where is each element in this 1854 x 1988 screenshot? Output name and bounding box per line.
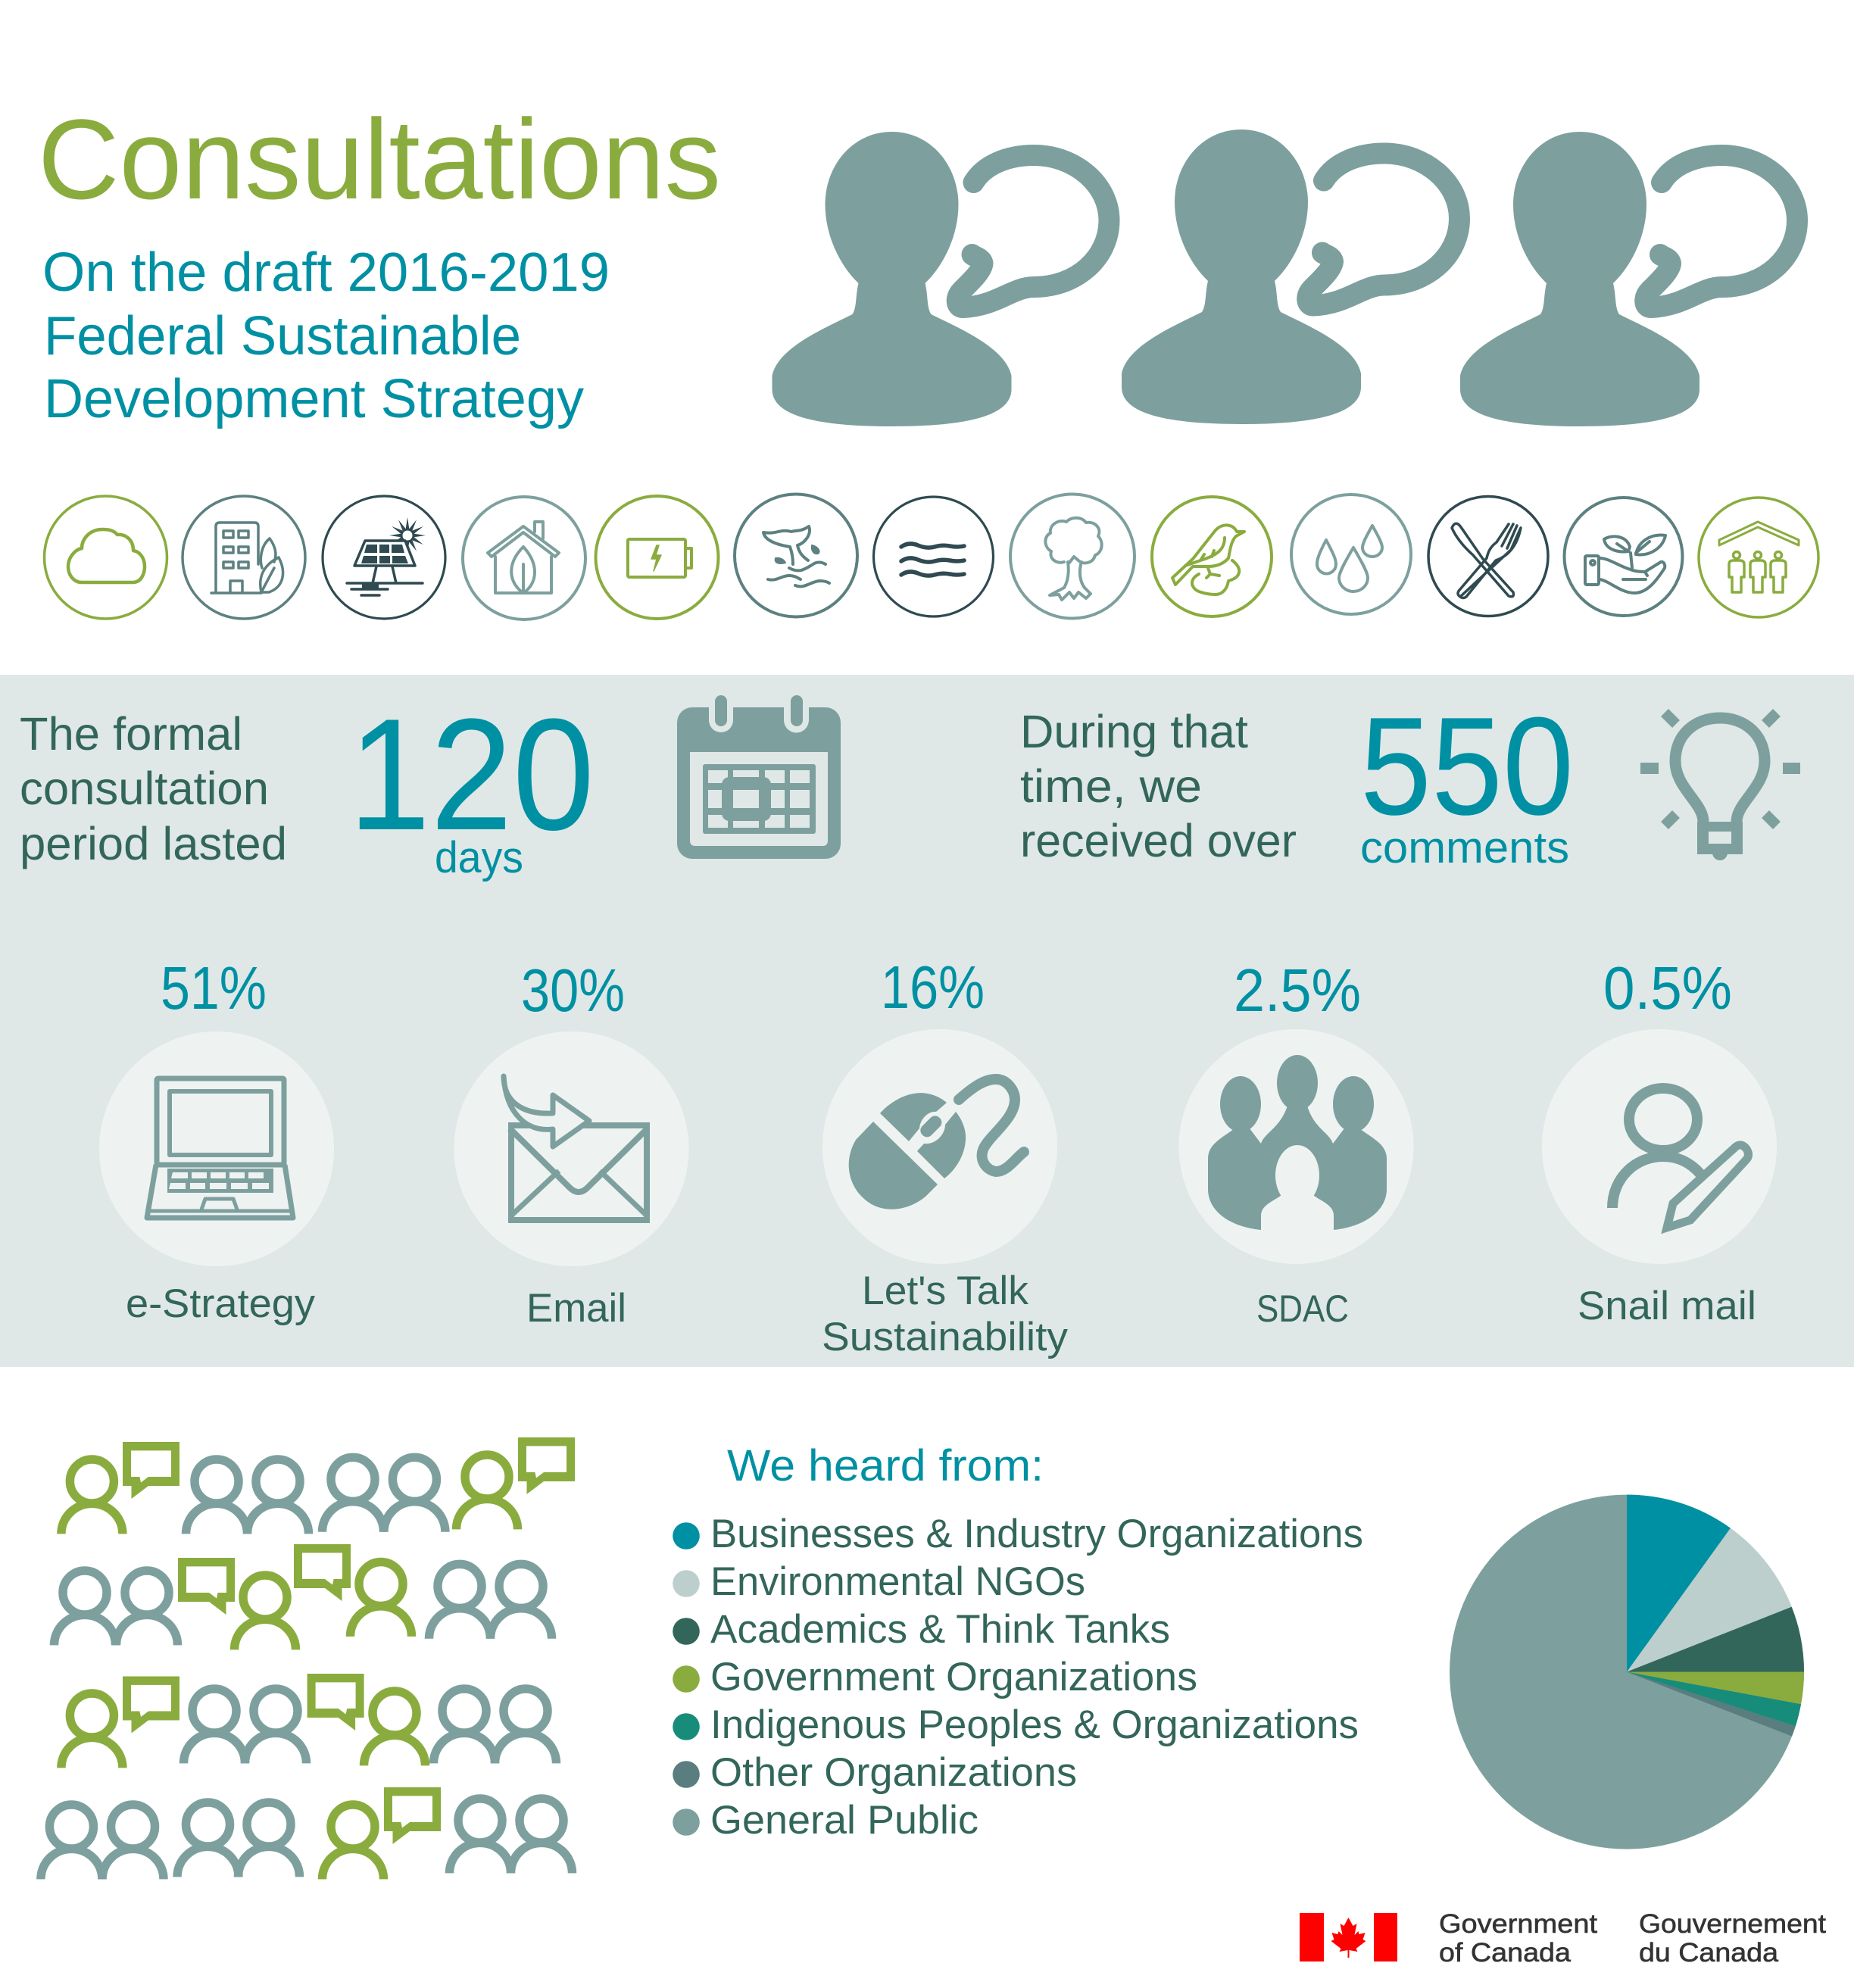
wordmark xyxy=(1439,1909,1826,1968)
icon: person with speech bubble 1 xyxy=(772,132,1109,426)
legend: Other: Other Organizations xyxy=(710,1750,1077,1795)
subtitle: Federal Sustainable xyxy=(44,306,521,367)
icon: person with pencil xyxy=(1612,1088,1748,1228)
wordmark: of Canada xyxy=(1439,1938,1572,1968)
stat: Let's Talk Sustainability 16%: 16% xyxy=(881,953,985,1021)
label: e-Strategy xyxy=(126,1281,315,1326)
teal people xyxy=(41,1457,572,1879)
stat: Email 30%: 30% xyxy=(521,957,625,1024)
icon: envelope with arrow xyxy=(504,1076,648,1220)
legend: General Public: General Public xyxy=(710,1798,978,1843)
icon: green building xyxy=(183,496,305,619)
Government of Canada signature xyxy=(1300,1909,1826,1968)
icon: knife and fork xyxy=(1428,497,1548,616)
subtitle: On the draft 2016-2019 xyxy=(42,242,610,303)
stat: SDAC 2.5% xyxy=(1178,957,1413,1330)
subtitle xyxy=(42,242,610,429)
stat: Snail mail 0.5%: 0.5% xyxy=(1603,954,1732,1022)
stat: SDAC 2.5%: 2.5% xyxy=(1234,957,1361,1024)
icon: computer mouse xyxy=(849,1079,1024,1209)
green people with speech bubbles xyxy=(61,1437,575,1879)
text: formal consultation period: consultation xyxy=(20,763,269,814)
icon: person with speech bubble 2 xyxy=(1122,130,1459,424)
number: 120 days: 120 xyxy=(348,685,595,863)
pie chart xyxy=(1450,1495,1804,1849)
stat: Snail mail 0.5% xyxy=(1542,954,1777,1328)
crowd of people xyxy=(41,1437,575,1879)
text: during that time xyxy=(1020,706,1297,866)
icon: solar panel xyxy=(323,496,445,619)
icon: water waves xyxy=(874,497,994,616)
panel: consultation stats xyxy=(0,675,1854,1367)
icon: water drops xyxy=(1291,495,1411,614)
legend xyxy=(673,1512,1363,1843)
label: Sustainability xyxy=(822,1315,1069,1359)
stat: Let's Talk Sustainability 16% xyxy=(822,953,1069,1359)
subtitle: Development Strategy xyxy=(44,369,584,429)
icon: Canadian flag xyxy=(1300,1913,1397,1961)
text: during that time: During that xyxy=(1020,706,1248,757)
icon: tree xyxy=(1010,494,1135,618)
label: Snail mail xyxy=(1578,1284,1756,1328)
text: during that time: time, we xyxy=(1020,760,1202,812)
icon: person with speech bubble 3 xyxy=(1460,132,1797,426)
icon: hand holding seedling xyxy=(1565,498,1683,616)
icon: laptop xyxy=(147,1078,293,1218)
icon: shelter and people xyxy=(1699,498,1818,617)
text: formal consultation period: The formal xyxy=(20,708,242,760)
label: Let's Talk xyxy=(862,1269,1028,1313)
number: 550 comments: comments xyxy=(1360,823,1569,872)
legend: Businesses: Businesses & Industry Organizations xyxy=(710,1512,1363,1556)
text: during that time: received over xyxy=(1020,815,1297,866)
icon: house with leaf xyxy=(463,497,585,619)
text: formal consultation period xyxy=(20,708,287,869)
text: formal consultation period: period lasted xyxy=(20,818,287,869)
icon: bird on branch xyxy=(1152,497,1272,616)
number: 120 days: days xyxy=(435,833,523,882)
legend: Government: Government Organizations xyxy=(710,1655,1197,1699)
label: SDAC xyxy=(1256,1287,1349,1330)
wordmark: Gouvernement xyxy=(1639,1909,1826,1939)
title: Consultations xyxy=(38,95,721,223)
icon: three people talking xyxy=(772,130,1797,426)
icon: light bulb xyxy=(1640,713,1800,860)
wordmark: Government xyxy=(1439,1909,1597,1939)
legend: Indigenous: Indigenous Peoples & Organizations xyxy=(710,1702,1359,1747)
icon: calendar xyxy=(677,695,841,859)
label xyxy=(822,1269,1069,1359)
label: Email xyxy=(526,1286,626,1331)
legend: Environmental NGOs: Environmental NGOs xyxy=(710,1559,1085,1604)
stat: e-Strategy 51%: 51% xyxy=(161,954,267,1022)
heading: we heard from: We heard from: xyxy=(727,1441,1044,1490)
icon: group of people xyxy=(1208,1055,1387,1231)
stat: Email 30% xyxy=(454,957,689,1331)
legend: Academics: Academics & Think Tanks xyxy=(710,1607,1170,1652)
icon: cloud xyxy=(44,496,167,619)
number: 550 comments: 550 xyxy=(1360,688,1574,844)
icon: battery xyxy=(595,496,718,619)
icon: whale tail xyxy=(735,494,857,616)
stat: e-Strategy 51% xyxy=(99,954,334,1326)
icon row: sustainability goals xyxy=(44,494,1818,619)
wordmark: du Canada xyxy=(1639,1938,1779,1968)
